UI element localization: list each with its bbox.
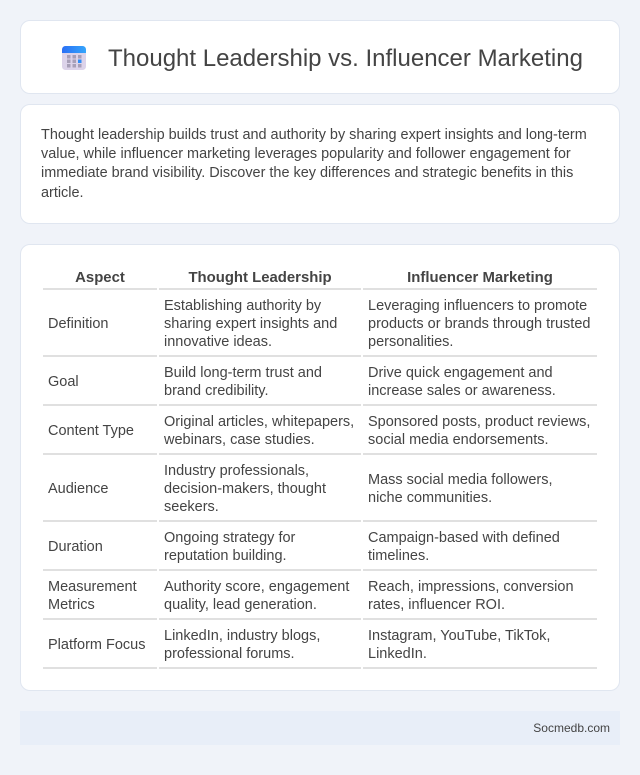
intro text [41,127,587,201]
comparison table: Original articles, whitepapers, [164,414,354,430]
header: thought leadership: Thought Leadership [188,270,332,286]
comparison table: Metrics [48,597,95,613]
header: aspect: Aspect [75,270,125,286]
row: platform focus [48,628,550,662]
intro text: Thought leadership builds trust and authority by sharing expert insights and long-term [41,127,587,143]
comparison table: rates, influencer ROI. [368,597,505,613]
comparison table: Authority score, engagement [164,579,349,595]
comparison table: Ongoing strategy for [164,530,295,546]
comparison table: personalities. [368,334,453,350]
comparison table: Leveraging influencers to promote [368,298,587,314]
row: definition [48,298,590,350]
comparison table: innovative ideas. [164,334,272,350]
comparison table: reputation building. [164,548,287,564]
comparison table: timelines. [368,548,429,564]
comparison table: Campaign-based with defined [368,530,560,546]
comparison table: Reach, impressions, conversion [368,579,574,595]
row: content type [48,414,590,448]
icon: calendar [62,46,86,70]
comparison table: webinars, case studies. [164,432,315,448]
comparison table: products or brands through trusted [368,316,590,332]
comparison table: social media endorsements. [368,432,549,448]
row: audience [48,463,553,515]
intro text: article. [41,185,84,201]
comparison table: quality, lead generation. [164,597,317,613]
comparison table: Sponsored posts, product reviews, [368,414,590,430]
comparison table: LinkedIn. [368,646,427,662]
title: Thought Leadership vs. Influencer Marketing [108,45,583,72]
row: measurement metrics [48,579,574,613]
comparison table: Instagram, YouTube, TikTok, [368,628,550,644]
comparison table: Platform Focus [48,637,146,653]
comparison table: Content Type [48,423,134,439]
comparison table: Definition [48,316,108,332]
table panel [20,244,620,691]
intro panel [20,104,620,224]
comparison table: niche communities. [368,490,492,506]
comparison table: Mass social media followers, [368,472,553,488]
intro text: value, while influencer marketing leverages popularity and follower engagement for [41,146,571,162]
intro text: immediate brand visibility. Discover the key differences and strategic benefits in this [41,165,573,181]
comparison table: decision-makers, thought [164,481,326,497]
header panel [20,20,620,94]
footer bar [20,711,620,745]
comparison table: Audience [48,481,108,497]
comparison table: Industry professionals, [164,463,309,479]
comparison table: Duration [48,539,103,555]
comparison table: seekers. [164,499,219,515]
comparison table: Measurement [48,579,137,595]
comparison table: professional forums. [164,646,295,662]
header: influencer marketing: Influencer Marketing [407,270,553,286]
comparison table: increase sales or awareness. [368,383,556,399]
comparison table: Drive quick engagement and [368,365,553,381]
comparison table: LinkedIn, industry blogs, [164,628,320,644]
comparison table: Build long-term trust and [164,365,322,381]
footer text: Socmedb.com [533,721,610,735]
comparison table: Goal [48,374,79,390]
row: goal [48,365,556,399]
comparison table [43,270,597,669]
row: duration [48,530,560,564]
comparison table: brand credibility. [164,383,269,399]
comparison table: Establishing authority by [164,298,321,314]
comparison table: sharing expert insights and [164,316,337,332]
